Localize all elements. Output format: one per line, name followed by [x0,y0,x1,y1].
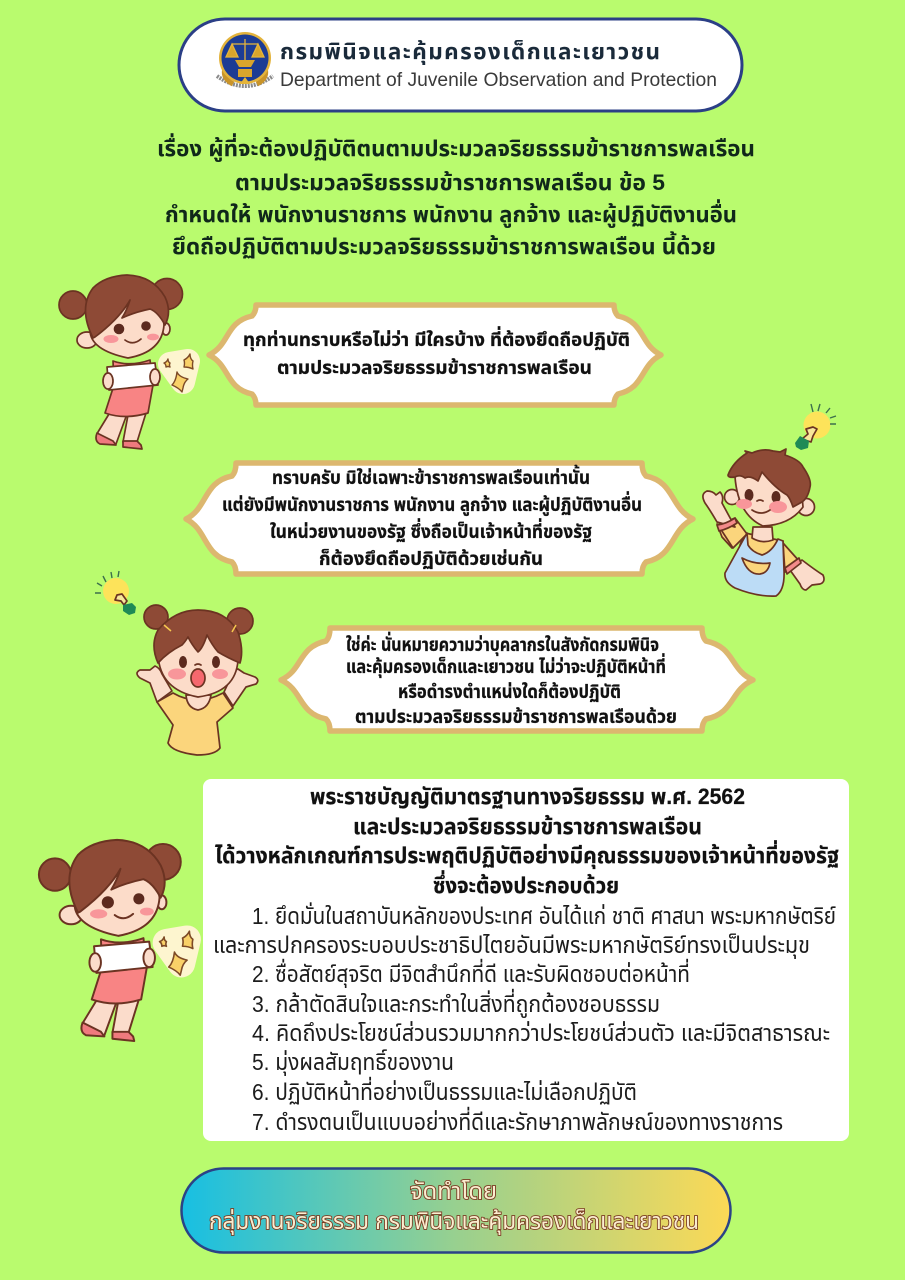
principles list: และการปกครองระบอบประชาธิปไตยอันมีพระมหากษัตริย์ทรงเป็นประมุข [213,932,810,959]
bubble 3 text: และคุ้มครองเด็กและเยาวชน ไม่ว่าจะปฏิบัติหน้าที่ [346,653,666,678]
footer text [209,1178,699,1235]
speech bubble 1 [209,305,661,405]
title text block: ตามประมวลจริยธรรมข้าราชการพลเรือน ข้อ 5 [235,170,665,195]
bubble 1 text: ทุกท่านทราบหรือไม่ว่า มีใครบ้าง ที่ต้องยึดถือปฏิบัติ [243,326,630,351]
footer text: กลุ่มงานจริยธรรม กรมพินิจและคุ้มครองเด็กและเยาวชน [209,1208,699,1235]
bubble 1 text [243,326,630,379]
department Thai name: กรมพินิจและคุ้มครองเด็กและเยาวชน [280,39,660,65]
footer pill [182,1168,730,1252]
principles list: 7. ดำรงตนเป็นแบบอย่างที่ดีและรักษาภาพลักษณ์ของทางราชการ [252,1106,783,1135]
panel heading: และประมวลจริยธรรมข้าราชการพลเรือน [353,814,702,839]
bubble 2 text: แต่ยังมีพนักงานราชการ พนักงาน ลูกจ้าง และผู้ปฏิบัติงานอื่น [222,491,642,516]
panel: ethics principles [203,779,849,1141]
footer text: จัดทำโดย [410,1178,497,1204]
panel heading [215,784,839,898]
bubble 3 text: ใช่ค่ะ นั่นหมายความว่าบุคลากรในสังกัดกรมพินิจ [346,632,659,656]
speech bubble 3 [281,628,753,731]
icon: sparkles [164,354,193,392]
principles list [213,901,836,1135]
icon: department seal [217,32,273,86]
icon: light bulb left [95,571,136,615]
character: girl holding sign 1 [59,275,193,449]
bubble 2 text: ทราบครับ มิใช่เฉพาะข้าราชการพลเรือนเท่านั้น [272,465,590,489]
header pill [179,19,742,111]
title text block [157,133,755,259]
principles list: 4. คิดถึงประโยชน์ส่วนรวมมากกว่าประโยชน์ส่วนตัว และมีจิตสาธารณะ [252,1020,830,1046]
title text block: ยึดถือปฏิบัติตามประมวลจริยธรรมข้าราชการพลเรือน นี้ด้วย [172,231,716,259]
title text block: กำหนดให้ พนักงานราชการ พนักงาน ลูกจ้าง และผู้ปฏิบัติงานอื่น [165,199,737,228]
bubble 3 text: หรือดำรงตำแหน่งใดก็ต้องปฏิบัติ [398,680,621,703]
character: girl holding sign 2 [39,840,193,1041]
bubble 2 text: ในหน่วยงานของรัฐ ซึ่งถือเป็นเจ้าหน้าที่ของรัฐ [270,518,592,543]
character: boy [703,449,824,596]
panel heading: ซึ่งจะต้องประกอบด้วย [433,870,619,898]
panel heading: พระราชบัญญัติมาตรฐานทางจริยธรรม พ.ศ. 2562 [310,784,745,809]
principles list: 2. ซื่อสัตย์สุจริต มีจิตสำนึกที่ดี และรับผิดชอบต่อหน้าที่ [252,958,690,988]
principles list: 3. กล้าตัดสินใจและกระทำในสิ่งที่ถูกต้องชอบธรรม [252,988,660,1019]
bubble 3 text: ตามประมวลจริยธรรมข้าราชการพลเรือนด้วย [355,706,677,728]
bubble 1 text: ตามประมวลจริยธรรมข้าราชการพลเรือน [277,357,592,379]
speech bubble 2 [186,463,693,574]
title text block: เรื่อง ผู้ที่จะต้องปฏิบัติตนตามประมวลจริยธรรมข้าราชการพลเรือน [157,133,755,162]
bubble 3 text [346,632,677,728]
character: cheering girl [137,605,258,755]
icon: light bulb right [795,404,836,450]
principles list: 5. มุ่งผลสัมฤทธิ์ของงาน [252,1048,454,1076]
principles list: 6. ปฏิบัติหน้าที่อย่างเป็นธรรมและไม่เลือกปฏิบัติ [252,1076,637,1105]
principles list: 1. ยึดมั่นในสถาบันหลักของประเทศ อันได้แก่ ชาติ ศาสนา พระมหากษัตริย์ [252,901,836,929]
bubble 2 text [222,465,642,570]
panel heading: ได้วางหลักเกณฑ์การประพฤติปฏิบัติอย่างมีคุณธรรมของเจ้าหน้าที่ของรัฐ [215,840,839,869]
department English name: Department of Juvenile Observation and Protection [280,69,717,91]
bubble 2 text: ก็ต้องยึดถือปฏิบัติด้วยเช่นกัน [319,547,543,570]
